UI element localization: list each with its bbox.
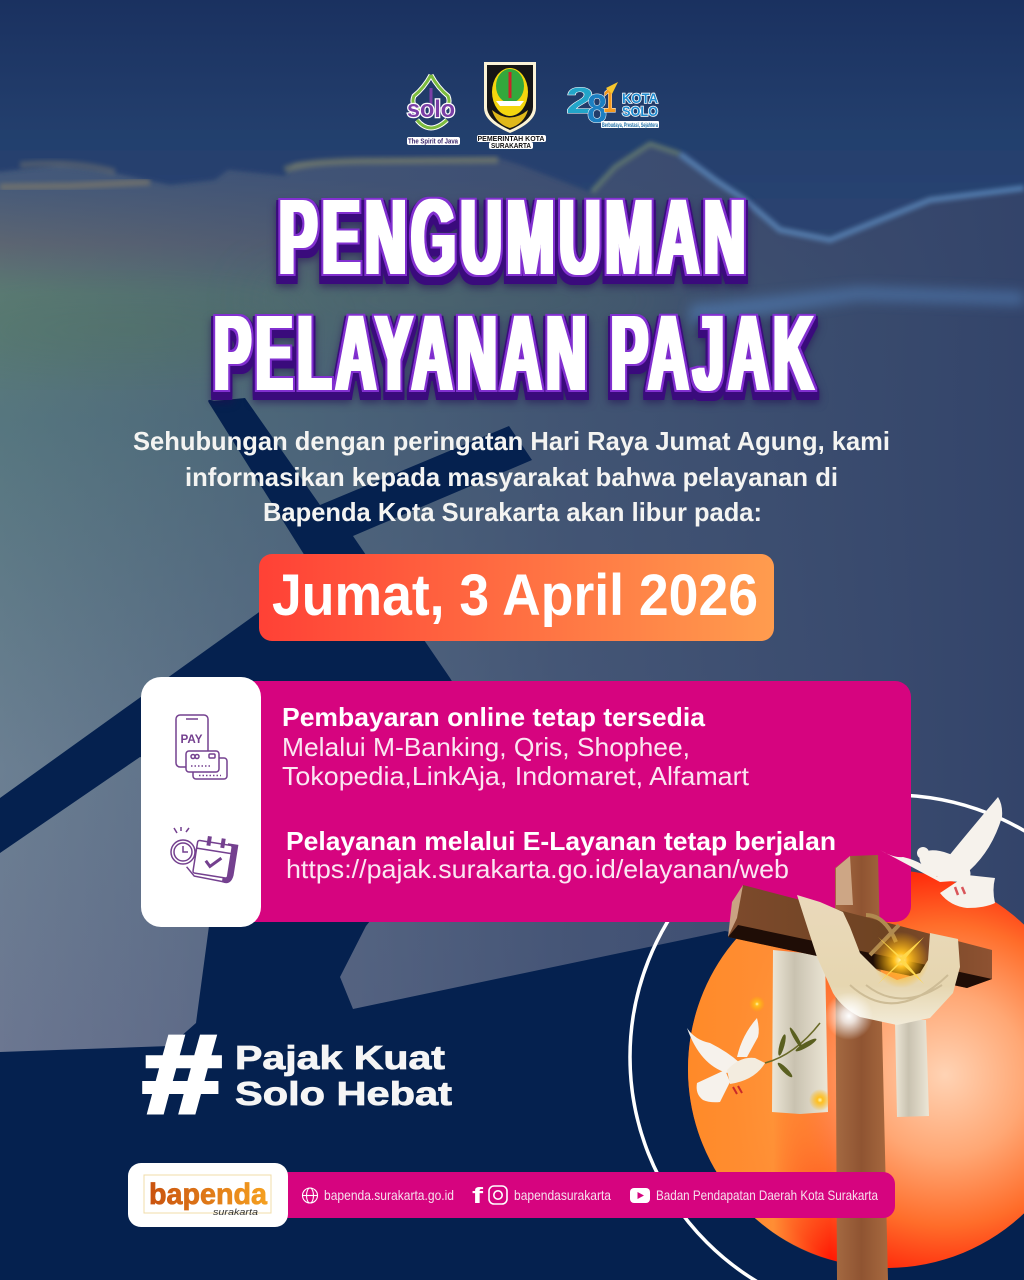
logo: 281 Kota Solo: Berbudaya, Prestasi, Sejahtera <box>602 123 658 129</box>
white icon card <box>141 677 261 927</box>
text: e-layanan <box>286 826 836 884</box>
text: online payment: Tokopedia,LinkAja, Indomaret, Alfamart <box>282 761 750 791</box>
cloth hanging left <box>772 950 828 1114</box>
dove: lower left with branch <box>687 1018 820 1102</box>
panel: services <box>141 677 911 927</box>
logo card: bapenda <box>128 1163 288 1227</box>
icon: globe <box>302 1188 318 1203</box>
text: online payment: Pembayaran online tetap tersedia <box>282 702 706 732</box>
illustration: cross with cloth <box>687 797 1002 1280</box>
icon: mobile pay <box>176 715 227 779</box>
dove: upper right <box>880 797 1002 908</box>
logo: Pemerintah Kota Surakarta shield: SURAKARTA <box>491 143 531 150</box>
panel background <box>220 681 911 922</box>
logo card: bapenda: surakarta <box>213 1207 258 1217</box>
logo: Solo The Spirit of Java: The Spirit of Java <box>408 138 458 146</box>
logo: Solo The Spirit of Java: solo <box>407 96 455 123</box>
icon: clock and calendar <box>171 827 238 883</box>
intro text: Sehubungan dengan peringatan Hari Raya Jumat Agung, kami <box>133 426 890 456</box>
horizontal beam <box>728 885 992 988</box>
logo: Pemerintah Kota Surakarta shield: PEMERINTAH KOTA <box>478 136 544 143</box>
decorative ring <box>630 795 1024 1280</box>
logo: 281 Kota Solo: 1 <box>603 82 616 120</box>
sparkles <box>749 932 929 1111</box>
hashtag text <box>235 1039 452 1112</box>
intro text: informasikan kepada masyarakat bahwa pelayanan di <box>185 462 838 492</box>
vertical beam <box>835 855 888 1280</box>
text: online payment <box>282 702 750 791</box>
hash symbol: # <box>143 1013 221 1136</box>
icon: mobile pay: PAY <box>180 734 203 746</box>
logo: Solo The Spirit of Java <box>407 75 460 146</box>
footer bar: bapendasurakarta <box>514 1187 611 1203</box>
hashtag text: Pajak Kuat <box>235 1039 445 1076</box>
orange sun circle <box>688 870 1024 1268</box>
cloth drape <box>797 895 960 1025</box>
title <box>214 176 818 413</box>
footer bar: bapenda.surakarta.go.id <box>324 1187 454 1203</box>
hashtag <box>143 1013 452 1136</box>
icon: youtube <box>630 1188 650 1203</box>
rope <box>866 915 899 955</box>
logo: 281 Kota Solo: KOTA <box>622 90 658 106</box>
logo: 281 Kota Solo: 2 <box>566 80 594 121</box>
logo: 281 Kota Solo <box>566 80 659 131</box>
footer bar <box>260 1172 895 1218</box>
icon: instagram <box>489 1186 507 1204</box>
logo: 281 Kota Solo: SOLO <box>622 103 658 119</box>
footer bar: Badan Pendapatan Daerah Kota Surakarta <box>656 1187 878 1203</box>
text: e-layanan: https://pajak.surakarta.go.id/elayanan/web <box>286 854 789 884</box>
cloth hanging right <box>895 1020 929 1117</box>
date banner: Jumat, 3 April 2026 <box>272 563 758 628</box>
hashtag text: Solo Hebat <box>235 1075 452 1112</box>
intro text <box>133 426 890 527</box>
icon: facebook: f <box>472 1183 484 1208</box>
logo card: bapenda: bapenda <box>149 1178 267 1211</box>
logo: 281 Kota Solo: 8 <box>587 87 607 131</box>
silhouette: figure carrying cross <box>0 398 1024 1280</box>
logos row <box>407 62 659 150</box>
text: online payment: Melalui M-Banking, Qris, Shophee, <box>282 732 690 762</box>
text: e-layanan: Pelayanan melalui E-Layanan tetap berjalan <box>286 826 836 856</box>
intro text: Bapenda Kota Surakarta akan libur pada: <box>263 497 762 527</box>
logo: Pemerintah Kota Surakarta shield <box>477 62 546 150</box>
